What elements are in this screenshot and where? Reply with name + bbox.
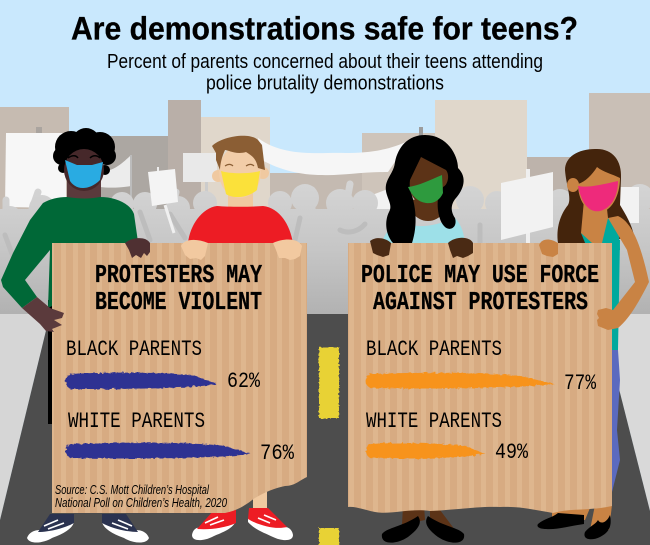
label: white parents left: WHITE PARENTS (68, 409, 205, 434)
sidewalks (0, 314, 50, 520)
panel: police may use force sign (348, 243, 612, 513)
bar: white parents 76% (66, 443, 251, 459)
source note: Source: C.S. Mott Children’s Hospital (55, 482, 210, 497)
heading: right sign (361, 260, 599, 317)
value: 49%: 49% (495, 440, 529, 465)
source note (55, 482, 228, 510)
road center stripes (319, 347, 339, 545)
subtitle (107, 51, 543, 94)
person 2: red shirt, yellow mask (188, 136, 293, 243)
city buildings (0, 93, 650, 227)
bar: black parents 77% (366, 373, 554, 389)
shoes and legs (27, 490, 612, 543)
subtitle: police brutality demonstrations (206, 72, 444, 94)
value: 76%: 76% (260, 441, 295, 466)
heading: left sign: PROTESTERS MAY (95, 260, 262, 290)
heading: left sign: BECOME VIOLENT (95, 287, 262, 317)
bar: black parents 62% (66, 373, 217, 389)
crowd silhouette (0, 184, 650, 314)
title: Are demonstrations safe for teens? (71, 10, 578, 46)
white protest signs in the background (5, 133, 410, 221)
bar: white parents 49% (366, 443, 486, 459)
value: 62%: 62% (227, 369, 261, 394)
sky background (0, 0, 650, 320)
person 1: green sweater, blue mask (1, 128, 138, 424)
heading: right sign: AGAINST PROTESTERS (373, 287, 588, 317)
road (0, 314, 650, 545)
label: white parents right: WHITE PARENTS (366, 409, 502, 434)
value: 77%: 77% (564, 371, 597, 396)
label: black parents left: BLACK PARENTS (66, 337, 202, 362)
person 3: light blue shirt, green mask (382, 135, 465, 243)
hands gripping signs (22, 238, 620, 332)
heading: left sign (95, 260, 262, 317)
signs rising from crowd on the right (501, 169, 639, 243)
label: black parents right: BLACK PARENTS (366, 337, 502, 362)
panel: protesters may become violent sign (52, 243, 307, 513)
subtitle: Percent of parents concerned about their teens attending (107, 51, 543, 73)
source note: National Poll on Children’s Health, 2020 (55, 495, 228, 510)
sign on a pole in the crowd (148, 169, 178, 233)
person 4: teal top, pink mask (557, 149, 649, 492)
